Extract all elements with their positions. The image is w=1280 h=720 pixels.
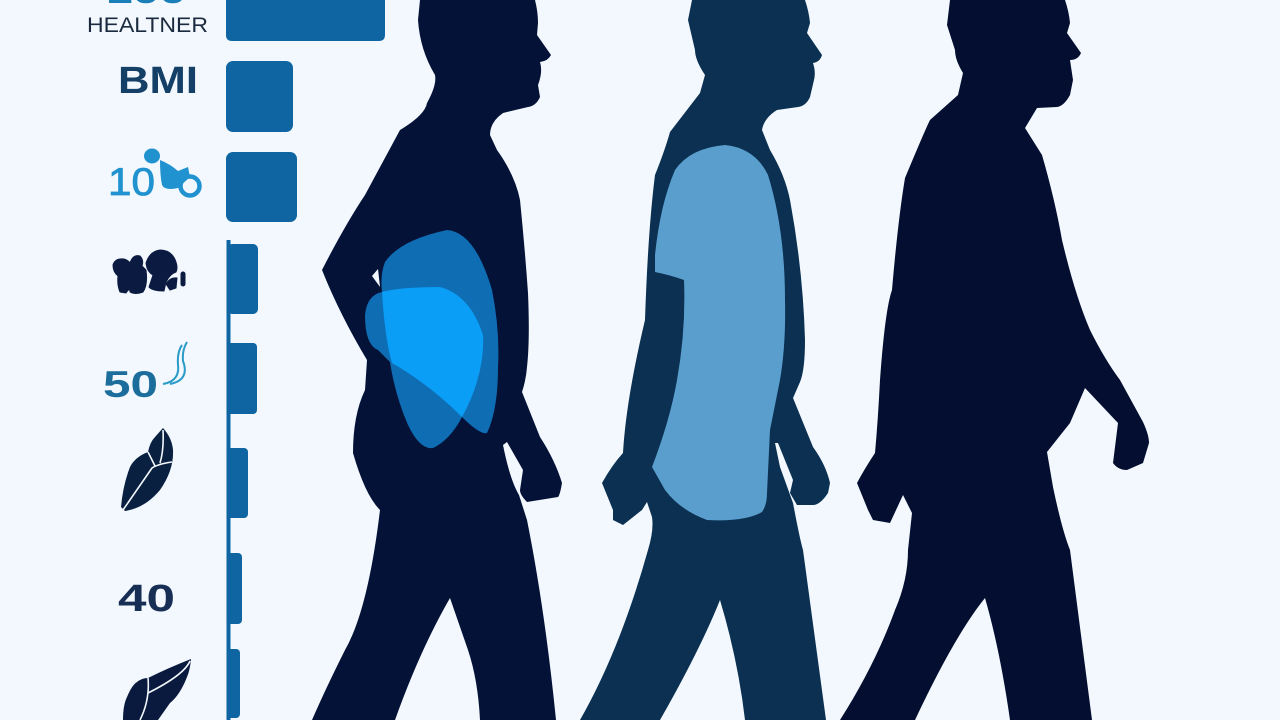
label: healthier: HEALTNER xyxy=(87,14,208,37)
label: 40: 40 xyxy=(118,578,175,620)
bar 1 xyxy=(226,0,385,41)
icon: leaf lower xyxy=(123,659,191,720)
icon: animal cluster xyxy=(113,250,185,294)
figure 3: silhouette xyxy=(840,0,1149,720)
icon: leaf upper xyxy=(121,428,173,511)
bar 2 xyxy=(226,61,293,132)
label: 10 with cyclist icon xyxy=(108,148,200,204)
torso highlight xyxy=(652,145,785,520)
inner liver highlight xyxy=(382,287,483,417)
icon: wave swirl xyxy=(163,342,187,384)
left labels column xyxy=(87,0,208,720)
outer liver shape xyxy=(365,230,498,448)
figure 2: silhouette with torso highlight xyxy=(580,0,830,720)
axis line xyxy=(226,240,230,720)
icon: cyclist xyxy=(144,148,200,196)
label: 50: 50 xyxy=(103,364,158,405)
bar 5 xyxy=(227,343,257,414)
figure 2 body xyxy=(580,0,830,720)
bar chart xyxy=(226,0,385,720)
label: BMI: BMI xyxy=(118,60,198,102)
number 10: 10 xyxy=(108,161,155,204)
bar 3 xyxy=(226,152,297,222)
figure 1 body xyxy=(312,0,562,720)
bar 6 xyxy=(227,448,248,518)
bar 4 xyxy=(227,244,258,314)
bar 8 xyxy=(227,649,240,718)
figure 3 body xyxy=(840,0,1149,720)
arm gap xyxy=(372,269,380,287)
figure 1: silhouette with liver overlay xyxy=(312,0,562,720)
bar 7 xyxy=(227,553,242,624)
